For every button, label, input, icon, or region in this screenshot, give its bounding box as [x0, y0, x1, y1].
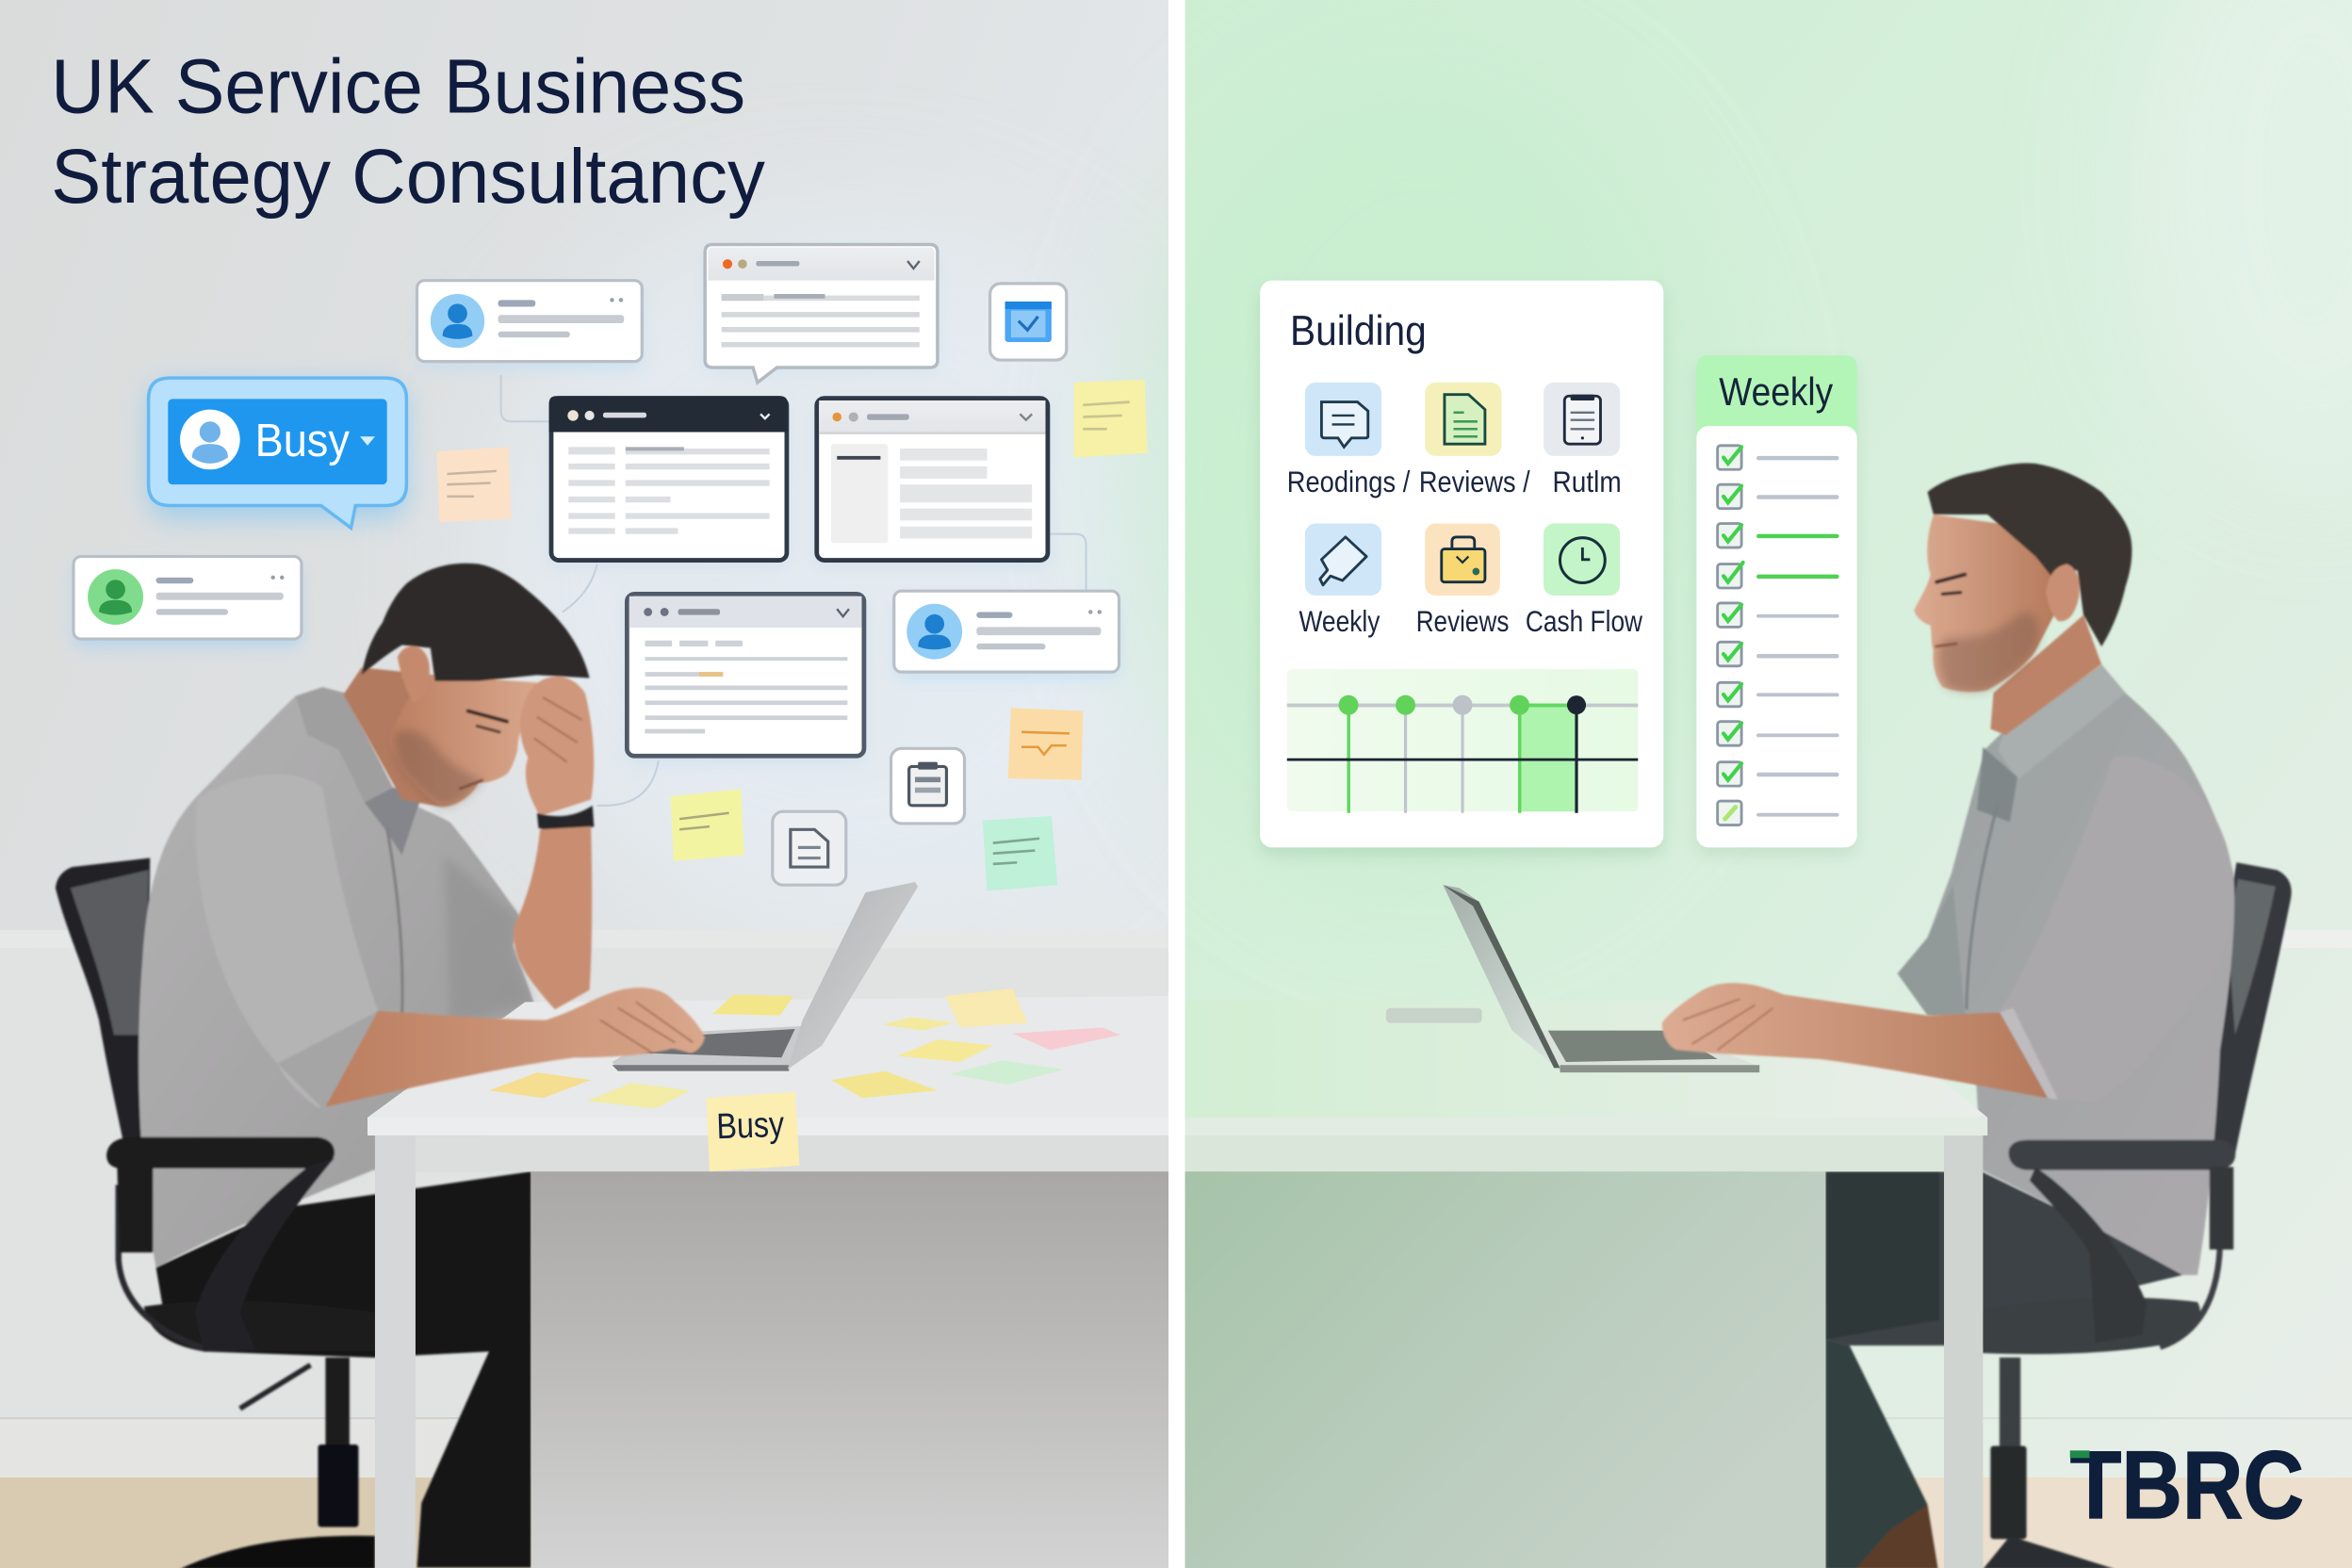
sticky note: orange — [1008, 708, 1083, 780]
checklist rows — [1718, 446, 1839, 825]
icon: message — [1305, 383, 1381, 456]
sleeve — [2000, 757, 2233, 1102]
icon label row 1 — [1287, 465, 1622, 498]
trousers — [1825, 1171, 2182, 1346]
icon: user avatar — [180, 410, 240, 469]
hair — [1928, 463, 2132, 646]
icon: clock — [1544, 524, 1620, 596]
chair back — [2202, 862, 2292, 1155]
right desk — [1185, 1001, 1987, 1568]
trousers — [156, 1171, 531, 1567]
icon: briefcase — [1425, 524, 1500, 596]
neck — [1990, 615, 2101, 735]
profile card: green — [74, 557, 302, 648]
right laptop — [1443, 885, 1759, 1072]
right panel: weekly checklist: Weekly — [1719, 370, 1833, 414]
hand on head — [520, 677, 594, 816]
icon label row 1: Reodings / — [1287, 465, 1410, 498]
icon label row 2: Reviews — [1416, 604, 1509, 638]
icon label row 1: Reviews / — [1419, 465, 1530, 498]
busy sticky note — [707, 1092, 799, 1171]
ear — [2046, 564, 2080, 621]
busy speech bubble — [149, 378, 406, 528]
right panel: weekly checklist — [1696, 355, 1857, 855]
watch — [537, 806, 594, 832]
title: UK Service Business — [51, 43, 745, 129]
sticky note: yellow — [671, 789, 744, 861]
collar — [1998, 664, 2126, 780]
left laptop — [612, 882, 918, 1071]
left desk — [368, 996, 1168, 1568]
icon: document — [773, 811, 846, 885]
TBRC logo: TBRC — [2070, 1431, 2304, 1539]
shirt body — [139, 696, 535, 1267]
busy speech bubble: Busy — [255, 415, 350, 466]
icon: green document — [1425, 383, 1501, 456]
phone on desk — [1386, 1008, 1482, 1023]
face — [1914, 514, 2058, 692]
face — [389, 675, 537, 807]
right panel: building card — [1260, 281, 1663, 855]
profile card: right — [894, 591, 1119, 679]
chair frame — [144, 1301, 375, 1351]
icon label row 2: Cash Flow — [1526, 604, 1643, 638]
typing forearm and hand — [1662, 983, 2048, 1098]
icon label row 2: Weekly — [1299, 604, 1380, 638]
timeline chart — [1287, 669, 1638, 813]
icon: marker — [1305, 524, 1381, 596]
stressed consultant: head and arms — [325, 564, 705, 1107]
icon label row 2 — [1299, 604, 1643, 638]
icon: clipboard — [891, 748, 965, 824]
left scene background — [0, 0, 1200, 1568]
shirt body — [1898, 664, 2234, 1275]
typing forearm and hand — [325, 988, 705, 1107]
dark header window — [549, 396, 788, 567]
document window: centre — [626, 594, 865, 763]
sticky note: peach — [436, 447, 512, 522]
sticky note: top right yellow — [1074, 380, 1148, 458]
ear — [398, 646, 430, 702]
sticky note: mint — [983, 816, 1057, 891]
icon: calendar check — [990, 284, 1067, 360]
collar — [296, 687, 393, 803]
right panel: building card: Building — [1290, 308, 1427, 354]
focused consultant: head and arm — [1662, 463, 2132, 1098]
speech window: top — [705, 244, 938, 383]
upper sleeve — [196, 775, 378, 1108]
connector lines — [501, 375, 1086, 806]
profile card: top — [417, 281, 642, 369]
right scene background — [1125, 0, 2352, 1568]
sidebar window — [814, 399, 1050, 567]
busy sticky note: Busy — [716, 1104, 786, 1147]
sticky notes on left desk — [489, 988, 1120, 1108]
white divider — [1168, 0, 1185, 1568]
neck — [344, 667, 441, 807]
icon label row 1: Rutlm — [1553, 465, 1622, 498]
chair back — [56, 858, 150, 1170]
chair seat and arm — [1982, 1298, 2200, 1354]
hair — [362, 564, 590, 681]
raised forearm — [514, 826, 592, 1009]
focused consultant: chair back and body — [1825, 664, 2292, 1568]
title: Strategy Consultancy — [51, 134, 765, 220]
icon: phone list — [1544, 383, 1620, 456]
stressed consultant: chair back and body — [56, 687, 535, 1568]
title — [51, 43, 765, 220]
